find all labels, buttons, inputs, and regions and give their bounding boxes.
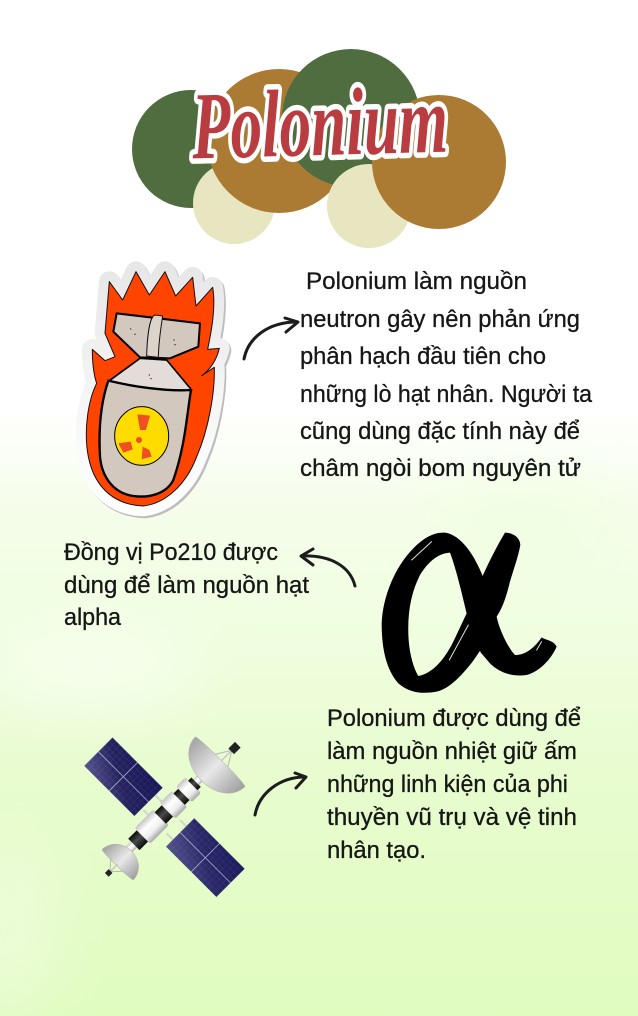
text: heat source: làm nguồn nhiệt giữ ấm bbox=[327, 738, 577, 765]
text: heat source: Polonium được dùng để bbox=[327, 705, 581, 732]
text: neutron source: cũng dùng đặc tính này để bbox=[300, 418, 580, 445]
text: neutron source: những lò hạt nhân. Người ta bbox=[300, 381, 593, 408]
arrow: to alpha text bbox=[301, 549, 355, 586]
title: Polonium bbox=[190, 66, 449, 179]
text: heat source: thuyền vũ trụ và vệ tinh bbox=[327, 804, 577, 831]
icon: alpha letter bbox=[382, 533, 557, 693]
text: neutron source: châm ngòi bom nguyên tử bbox=[300, 455, 581, 482]
title cluster of painted circles bbox=[132, 49, 506, 248]
text: heat source: những linh kiện của phi bbox=[327, 771, 568, 798]
arrow: to neutron text bbox=[244, 318, 298, 359]
text: heat source: nhân tạo. bbox=[327, 837, 426, 864]
arrow: to heat text bbox=[255, 773, 306, 815]
text: neutron source bbox=[300, 268, 593, 482]
text: alpha source: dùng để làm nguồn hạt bbox=[64, 572, 309, 599]
icon: satellite bbox=[82, 720, 262, 900]
icon: nuclear bomb sticker bbox=[86, 272, 221, 508]
text: neutron source: neutron gây nên phản ứng bbox=[300, 306, 580, 333]
text: heat source bbox=[327, 705, 581, 864]
text: alpha source bbox=[64, 539, 309, 631]
text: neutron source: Polonium làm nguồn bbox=[306, 268, 527, 295]
text: alpha source: alpha bbox=[64, 604, 122, 631]
text: alpha source: Đồng vị Po210 được bbox=[64, 539, 278, 566]
text: neutron source: phân hạch đầu tiên cho bbox=[300, 343, 546, 370]
